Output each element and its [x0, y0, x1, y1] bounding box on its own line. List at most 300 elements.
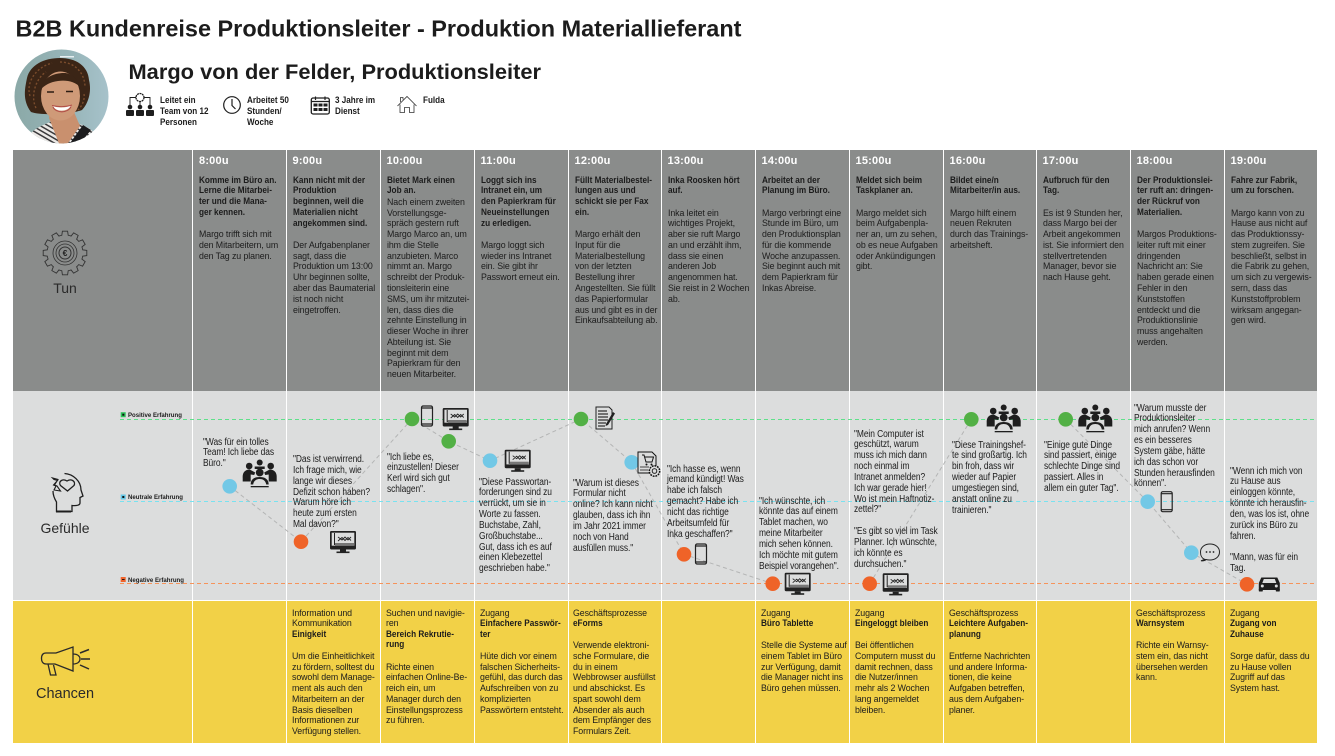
step 18:00: Fehler in den — [1136, 283, 1187, 294]
step 9:00: Uhr beginnen sollte, — [292, 272, 369, 283]
step 11:00: Margo loggt sich — [480, 240, 544, 251]
quote 10:00: einzustellen! Dieser — [387, 462, 459, 473]
panel: Tun background — [13, 150, 1317, 391]
step 18:00: Kunststoffen — [1136, 294, 1184, 305]
opportunity 11:00: komplizierten — [480, 694, 530, 705]
icon: monitor 10:00 — [443, 408, 469, 430]
step 16:00 — [950, 155, 1028, 251]
step 18:00: leiter ruft mit einer — [1136, 240, 1205, 251]
quote 17:00: schlechte Dinge sind — [1044, 461, 1120, 472]
icon: phone 10:00 — [422, 406, 432, 426]
quote 8:00: "Was für ein tolles — [203, 436, 268, 448]
step 13:00: 13:00u — [668, 155, 704, 167]
step 10:00: Vorstellungsge- — [386, 208, 446, 219]
opportunity 9:00: Informationen zur — [292, 715, 359, 726]
step 12:00: ein. — [574, 206, 589, 217]
step 13:00: Sie reist in 2 Wochen — [668, 283, 749, 294]
quote 13:00: Inka geschaffen?" — [667, 529, 732, 540]
opportunity 18:00: übersehen werden — [1136, 662, 1208, 673]
opportunity 15:00: lang angemeldet — [855, 694, 919, 705]
step 19:00: das Produktionssy- — [1230, 229, 1304, 240]
quote 11:00: Gut, dass ich es auf — [479, 542, 552, 553]
quote 17:00: sind passiert, einige — [1044, 450, 1116, 461]
legend markers — [121, 412, 126, 582]
opportunity 19:00: System hast. — [1230, 683, 1280, 694]
quote 11:00: Buchstabe, Zahl, — [479, 520, 541, 531]
quote 13:00: jemand kündigt! Was — [667, 474, 743, 485]
quote 18:00: mich anrufen? Wenn — [1134, 424, 1210, 435]
opportunity 9:00: Kommunikation — [292, 618, 352, 629]
step 13:00: auf. — [668, 184, 682, 195]
quote 14:00 — [759, 496, 839, 572]
label: Gefühle: Gefühle — [40, 520, 90, 536]
step 10:00: Abteilung ist. Sie — [386, 337, 451, 348]
quote 19:00: einloggen könnte, — [1230, 487, 1295, 498]
icon: chat bubble — [1200, 544, 1220, 561]
icon: gear with euro: € — [63, 248, 68, 258]
step 19:00: die Fabrik zu gehen, — [1230, 261, 1309, 272]
opportunity 10:00: ren — [386, 618, 398, 629]
step 15:00: ob es neue Aufgaben — [856, 240, 937, 251]
step 13:00: angenommen hat. — [668, 272, 737, 283]
opportunity 14:00: Büro Tablette — [761, 617, 813, 628]
step 13:00: dass sie einen — [668, 251, 723, 262]
icon: monitor 15:00 — [883, 573, 909, 595]
step 9:00: aber das Baumaterial — [292, 283, 375, 294]
quote 15:00: "Mein Computer ist — [854, 428, 924, 440]
step 14:00: Planung im Büro. — [762, 184, 829, 195]
opportunity 15:00 — [849, 600, 942, 742]
icon: people 17:00 — [1078, 404, 1112, 432]
step 13:00: wichtiges Projekt, — [668, 218, 735, 229]
quote 13:00 — [666, 464, 744, 540]
opportunity 12:00: eForms — [573, 617, 603, 628]
quote 10:00 — [387, 452, 459, 495]
opportunity 14:00: die Manager nicht ins — [761, 672, 843, 683]
step 10:00: tionsleiterin eine — [386, 283, 449, 294]
legend: positive: Positive Erfahrung — [128, 412, 182, 418]
opportunity 10:00: Richte einen — [386, 662, 434, 673]
quote 16:00 — [952, 440, 1027, 516]
icon: order form with cart and gear — [638, 452, 660, 476]
step 9:00: Der Aufgabenplaner — [292, 240, 369, 251]
quote 11:00 — [479, 476, 552, 574]
step 10:00: anzubieten. Marco — [386, 251, 458, 262]
quote 16:00: bin froh, dass wir — [952, 461, 1014, 472]
quote 11:00: einen Klebezettel — [479, 552, 542, 563]
step 11:00: 11:00u — [480, 155, 516, 167]
icon: monitor 14:00 — [785, 573, 811, 595]
step 8:00: Margo trifft sich mit — [199, 229, 271, 240]
step 11:00: Neueinstellungen — [480, 206, 549, 217]
quote 8:00: Büro." — [203, 458, 225, 469]
icon: head with heart and lightning — [50, 472, 84, 512]
step 13:00: aber sie ruft Margo — [668, 229, 740, 240]
step 14:00: Margo verbringt eine — [762, 208, 841, 219]
step 10:00: beginnt mit dem — [386, 348, 448, 359]
opportunity 15:00: damit rechnen, dass — [855, 662, 933, 673]
opportunity 16:00: Geschäftsprozess — [949, 608, 1018, 619]
step 19:00: 19:00u — [1230, 155, 1267, 167]
step 13:00 — [668, 155, 749, 305]
step 12:00: Input für die — [574, 240, 620, 251]
quote 19:00: zurück ins Büro zu — [1230, 520, 1297, 531]
step 14:00: dem Papierkram für — [762, 272, 837, 283]
opportunity 15:00: Bei öffentlichen — [855, 640, 914, 651]
step 19:00: wirksam angegan- — [1230, 305, 1301, 316]
team text: Personen — [160, 116, 196, 126]
icon: monitor 9:00 — [330, 531, 356, 553]
opportunity 9:00: Mitarbeitern an der — [292, 694, 364, 705]
quote 19:00: Tag. — [1230, 563, 1245, 574]
quote 12:00: glauben, dass ich ihn — [573, 510, 650, 521]
quote 11:00: geschrieben habe." — [479, 563, 550, 574]
step 11:00: Loggt sich ins — [480, 174, 536, 184]
hours text: Woche — [247, 116, 273, 126]
team text — [160, 94, 208, 126]
emotion dots — [222, 412, 1254, 592]
step 15:00: Taskplaner an. — [856, 184, 912, 195]
icon: clock — [223, 96, 241, 114]
opportunity 9:00: Basis dieselben — [292, 705, 352, 716]
icon: gear with euro — [42, 230, 88, 276]
opportunity 11:00: Aufschreiben von zu — [480, 683, 558, 694]
step 11:00: Passwort erneut ein. — [480, 272, 559, 283]
opportunity 16:00: planer. — [949, 705, 975, 716]
opportunity 11:00 — [480, 608, 563, 716]
step 8:00: Lerne die Mitarbei- — [199, 184, 272, 195]
step 11:00 — [480, 155, 559, 283]
opportunity 9:00: Um die Einheitlichkeit — [292, 651, 374, 662]
step 17:00: Manager, bevor sie — [1042, 261, 1116, 272]
opportunity 14:00: zur Verfügung, damit — [761, 662, 841, 673]
quote 12:00: ausfüllen muss." — [573, 543, 633, 554]
step 12:00: Einkaufsabteilung ab. — [574, 315, 657, 326]
opportunity 12:00: Geschäftsprozesse — [573, 608, 647, 619]
icon: team organisation — [126, 92, 154, 116]
opportunity 9:00: Einigkeit — [292, 628, 326, 639]
opportunity 18:00: Geschäftsprozess — [1136, 608, 1205, 619]
step 9:00: angekommen sind. — [292, 217, 367, 228]
step 17:00: Aufbruch für den — [1042, 174, 1109, 184]
step 11:00: wieder ins Intranet — [480, 251, 551, 262]
icon: megaphone — [40, 646, 90, 676]
opportunity 16:00: planung — [949, 628, 981, 639]
opportunity 16:00: Entferne Nachrichten — [949, 651, 1030, 662]
step 19:00: gen wird. — [1230, 315, 1265, 326]
opportunity 19:00: Zuhause — [1230, 628, 1264, 639]
step 13:00: ab. — [668, 294, 680, 305]
step 10:00: dieser Woche in ihrer — [386, 326, 468, 337]
step 12:00: schickt sie per Fax — [574, 195, 648, 206]
quote 14:00: "Ich wünschte, ich — [759, 496, 825, 506]
quote 11:00: verrückt, um sie in — [479, 498, 546, 509]
quote 9:00: Defizit schon haben? — [293, 487, 370, 498]
opportunity 14:00: einem Tablet im Büro — [761, 651, 842, 662]
step 17:00: stellvertretenden — [1042, 251, 1106, 262]
step 18:00: muss angehalten — [1136, 326, 1202, 337]
step 12:00: lungen aus und — [574, 184, 635, 195]
quote 18:00: es ein besseres — [1134, 435, 1192, 446]
quote 14:00: Tablet machen, wo — [759, 517, 828, 528]
opportunity 19:00 — [1224, 600, 1317, 742]
step 10:00: SMS, um ihr mitzutei- — [386, 294, 469, 305]
step 15:00: beim Aufgabenpla- — [856, 218, 928, 229]
quote 19:00: "Mann, was für ein — [1230, 552, 1298, 563]
opportunity 14:00: Stelle die Systeme auf — [761, 640, 847, 651]
step 19:00: sern, dass das — [1230, 283, 1287, 294]
step 19:00: beschließt, selbst in — [1230, 251, 1306, 262]
opportunity 19:00: Zugang von — [1230, 617, 1276, 628]
icon: people 16:00 — [987, 404, 1021, 432]
step 9:00: 9:00u — [292, 155, 322, 167]
step 10:00: spräch gestern ruft — [386, 218, 458, 229]
step 14:00: Sie beginnt auch mit — [762, 261, 840, 272]
opportunity 11:00: Passwörtern entsteht. — [480, 705, 563, 716]
icon: monitor 11:00 — [505, 450, 531, 472]
quote 10:00: schlagen". — [387, 484, 425, 495]
opportunity 11:00: Hüte dich vor einem — [480, 651, 556, 662]
opportunity 14:00: Zugang — [761, 608, 790, 619]
quote 16:00: te sind großartig. Ich — [952, 450, 1027, 461]
step 19:00: um zu forschen. — [1230, 184, 1293, 195]
quote 15:00: muss ich mich dann — [854, 450, 927, 461]
step 10:00: len, dass dies die — [386, 305, 453, 316]
quote 13:00: Arbeitsumfeld für — [667, 518, 729, 529]
panel: Chancen background — [13, 600, 1317, 743]
step 14:00: Woche anzupassen. — [762, 251, 840, 262]
opportunity 9:00: zu fördern, solltest du — [292, 662, 374, 673]
step 17:00: ist. Sie informiert den — [1042, 240, 1123, 251]
journey line — [230, 419, 1247, 584]
step 16:00: Mitarbeiter/in aus. — [950, 184, 1020, 195]
step 12:00: Margo erhält den — [574, 229, 640, 240]
quote 16:00: "Diese Trainingshef- — [952, 440, 1026, 450]
opportunity 16:00: tionen, die keine — [949, 672, 1012, 683]
step 18:00: 18:00u — [1136, 155, 1173, 167]
step 11:00: Intranet ein, um — [480, 184, 542, 195]
step 14:00: Inkas Abreise. — [762, 283, 816, 294]
quote 12:00: "Warum ist dieses — [573, 478, 639, 488]
step 13:00: Inka leitet ein — [668, 208, 718, 219]
step 13:00: anderen Job — [668, 261, 716, 272]
step 17:00: 17:00u — [1042, 155, 1079, 167]
step 8:00: den Tag zu planen. — [199, 251, 272, 262]
step 15:00: Meldet sich beim — [856, 174, 922, 184]
persona name: Margo von der Felder, Produktionsleiter — [128, 60, 542, 84]
label: Tun: Tun — [53, 280, 77, 296]
step 8:00: ger kennen. — [199, 206, 245, 217]
step 11:00: den Papierkram für — [480, 195, 555, 206]
quote 13:00: "Ich hasse es, wenn — [667, 464, 740, 474]
quote 15:00: zettel?" — [854, 504, 881, 515]
step 12:00: das Papierformular — [574, 294, 647, 305]
step 10:00: Nach einem zweiten — [386, 197, 464, 208]
opportunity 10:00: rung — [386, 638, 404, 649]
quote 14:00: meine Mitarbeiter — [759, 528, 823, 539]
quote 15:00: ich könnte es — [854, 548, 903, 559]
step 9:00: Produktion um 13:00 — [292, 261, 372, 272]
quote 15:00: Ich war gerade hier! — [854, 483, 927, 494]
step 12:00: 12:00u — [574, 155, 611, 167]
quote 15:00: durchsuchen." — [854, 559, 906, 570]
opportunity 12:00: sche Formulare, die — [573, 651, 649, 662]
step 9:00: beginnen, weil die — [292, 195, 363, 206]
quote 15:00: Planner. Ich wünschte, — [854, 537, 937, 548]
opportunity 11:00: Zugang — [480, 608, 509, 619]
step 17:00: nach Hause geht. — [1042, 272, 1110, 283]
quote 13:00: nicht das richtige — [667, 507, 728, 518]
quote 10:00: Kerl wird sich gut — [387, 473, 450, 484]
portrait photo — [14, 50, 108, 144]
quote 16:00: wieder auf Papier — [952, 472, 1016, 483]
opportunity 19:00: Zugang — [1230, 608, 1259, 619]
step 12:00 — [574, 155, 658, 326]
opportunity 18:00 — [1130, 600, 1223, 742]
quote 17:00: allem ein guter Tag". — [1044, 483, 1118, 494]
step 14:00: für die kommende — [762, 240, 831, 251]
step 8:00: 8:00u — [199, 155, 229, 167]
step 18:00: Der Produktionslei- — [1136, 174, 1212, 184]
step 12:00: Füllt Materialbestel- — [574, 174, 652, 184]
quote 14:00: Ich möchte mit gutem — [759, 550, 838, 561]
opportunity 18:00: kann. — [1136, 672, 1157, 683]
opportunity 9:00: sowohl dem Manage- — [292, 672, 375, 683]
step 12:00: von der letzten — [574, 261, 631, 272]
opportunity 16:00: Leichtere Aufgaben- — [949, 617, 1028, 628]
opportunity 14:00 — [755, 600, 848, 742]
opportunity 12:00: Verwende elektroni- — [573, 640, 649, 651]
step 10:00: Papierkram für den — [386, 358, 460, 369]
quote 15:00 — [854, 428, 938, 570]
step 18:00: entdeckt und die — [1136, 305, 1200, 316]
step 15:00: 15:00u — [856, 155, 892, 167]
quote 15:00: "Es gibt so viel im Task — [854, 526, 938, 537]
icon: document with pencil — [596, 407, 615, 429]
opportunity 10:00: Einstellungsprozess — [386, 705, 463, 716]
step 19:00: stem zugreifen. Sie — [1230, 240, 1304, 251]
team text: Leitet ein — [160, 94, 195, 104]
step 10:00: Job an. — [386, 184, 415, 195]
quote 9:00: heute zum ersten — [293, 508, 357, 519]
quote 17:00 — [1044, 440, 1120, 494]
panel: Gefühle background — [13, 391, 1317, 600]
quote 15:00: noch einmal im — [854, 461, 909, 472]
quote 15:00: geschützt, warum — [854, 439, 919, 450]
opportunity 19:00: Sorge dafür, dass du — [1230, 651, 1310, 662]
quote 18:00: System gäbe, hätte — [1134, 446, 1205, 457]
step 16:00: arbeitsheft. — [950, 240, 992, 251]
step 16:00: durch das Trainings- — [950, 229, 1028, 240]
step 19:00: Margo kann von zu — [1230, 208, 1304, 219]
step 12:00: Bestellung ihrer — [574, 272, 634, 283]
opportunity 12:00: spart sowohl dem — [573, 694, 641, 705]
step 11:00: zu erledigen. — [480, 217, 531, 228]
step 19:00: Hause aus nicht auf — [1230, 218, 1307, 229]
quote 14:00: mich sehen können. — [759, 539, 833, 550]
step 14:00: Arbeitet an der — [762, 174, 819, 184]
quote 16:00: umgestiegen sind, — [952, 483, 1019, 494]
quote 11:00: Worte zu fassen. — [479, 509, 541, 520]
quote 12:00: online? Ich kann nicht — [573, 499, 652, 510]
opportunity 15:00: die Nutzer/innen — [855, 672, 918, 683]
quote 15:00: Wo ist mein Haftnotiz- — [854, 494, 934, 505]
opportunity 12:00: Formulars Zeit. — [573, 726, 631, 737]
quote 10:00: "Ich liebe es, — [387, 452, 434, 462]
quote 14:00: Beispiel vorangehen". — [759, 561, 839, 572]
opportunity 11:00: gefühl, das durch das — [480, 672, 562, 683]
step 14:00 — [762, 155, 841, 294]
step 10:00: schreibt der Produk- — [386, 272, 464, 283]
step 12:00: Materialbestellung — [574, 251, 644, 262]
years text: 3 Jahre im — [334, 94, 375, 104]
quote 17:00: passiert. Alles in — [1044, 472, 1103, 483]
quote 13:00: habe ich falsch — [667, 485, 722, 496]
step 10:00 — [386, 155, 470, 380]
quote 19:00: den, was los ist, ohne — [1230, 509, 1309, 520]
step 17:00: Es ist 9 Stunden her, — [1042, 208, 1122, 219]
opportunity 11:00: Einfachere Passwör- — [480, 617, 560, 628]
opportunity 14:00: Büro gehen müssen. — [761, 683, 841, 694]
opportunity 18:00: stem ein, das nicht — [1136, 651, 1208, 662]
opportunity 15:00: bleiben. — [855, 705, 885, 716]
label: Chancen: Chancen — [36, 686, 94, 702]
hours text — [247, 94, 289, 126]
quote 18:00: können". — [1134, 478, 1167, 489]
quote 11:00: Großbuchstabe... — [479, 531, 543, 542]
step 10:00: nimmt an. Margo — [386, 261, 451, 272]
opportunity 11:00: ter — [480, 628, 490, 639]
quote 12:00: im Jahr 2021 immer — [573, 521, 646, 532]
quote 19:00: fahren. — [1230, 531, 1255, 542]
icon: house — [397, 96, 417, 113]
quote 13:00: gemacht? Habe ich — [667, 496, 738, 507]
step 18:00: Nachricht an: Sie — [1136, 261, 1202, 272]
opportunity 12:00: Webbrowser ausfüllst — [573, 672, 655, 683]
step 10:00: neuen Mitarbeiter. — [386, 369, 456, 380]
step 10:00: Bietet Mark einen — [386, 174, 454, 184]
quote 19:00 — [1230, 466, 1309, 574]
quote 11:00: "Diese Passwortan- — [479, 476, 551, 488]
step 18:00: haben gerade einen — [1136, 272, 1213, 283]
quote 9:00: Mal davon?" — [293, 519, 339, 530]
step 8:00: den Mitarbeitern, um — [199, 240, 278, 251]
step 15:00: oder Ankündigungen — [856, 251, 935, 262]
icon: people 8:00 — [243, 460, 277, 487]
step 10:00: Margo Marco an, um — [386, 229, 466, 240]
years text — [334, 94, 375, 116]
step 18:00 — [1136, 155, 1216, 348]
step 10:00: zehnte Einstellung in — [386, 315, 466, 326]
legend: negative: Negative Erfahrung — [128, 576, 184, 584]
step 13:00: Inka Roosken hört — [668, 174, 739, 184]
step 17:00: dass Margo bei der — [1042, 218, 1116, 229]
quote 14:00: könnte das auf einem — [759, 506, 838, 517]
hours text: Stunden/ — [247, 106, 282, 116]
opportunity 16:00: Aufgaben betreffen, — [949, 683, 1025, 694]
step 8:00: ter und die Mana- — [199, 195, 267, 206]
quote 16:00: trainieren." — [952, 505, 991, 516]
icon: calendar — [310, 96, 330, 115]
opportunity 18:00: Warnsystem — [1136, 617, 1184, 628]
opportunity 10:00: zu führen. — [386, 715, 424, 726]
quote 9:00: Ich frage mich, wie — [293, 465, 362, 476]
years text: Dienst — [334, 106, 359, 116]
opportunity 15:00: Eingeloggt bleiben — [855, 617, 928, 628]
step 18:00: ter ruft an: dringen- — [1136, 184, 1213, 195]
hours text: Arbeitet 50 — [247, 94, 289, 104]
step 16:00: Bildet eine/n — [950, 174, 998, 184]
